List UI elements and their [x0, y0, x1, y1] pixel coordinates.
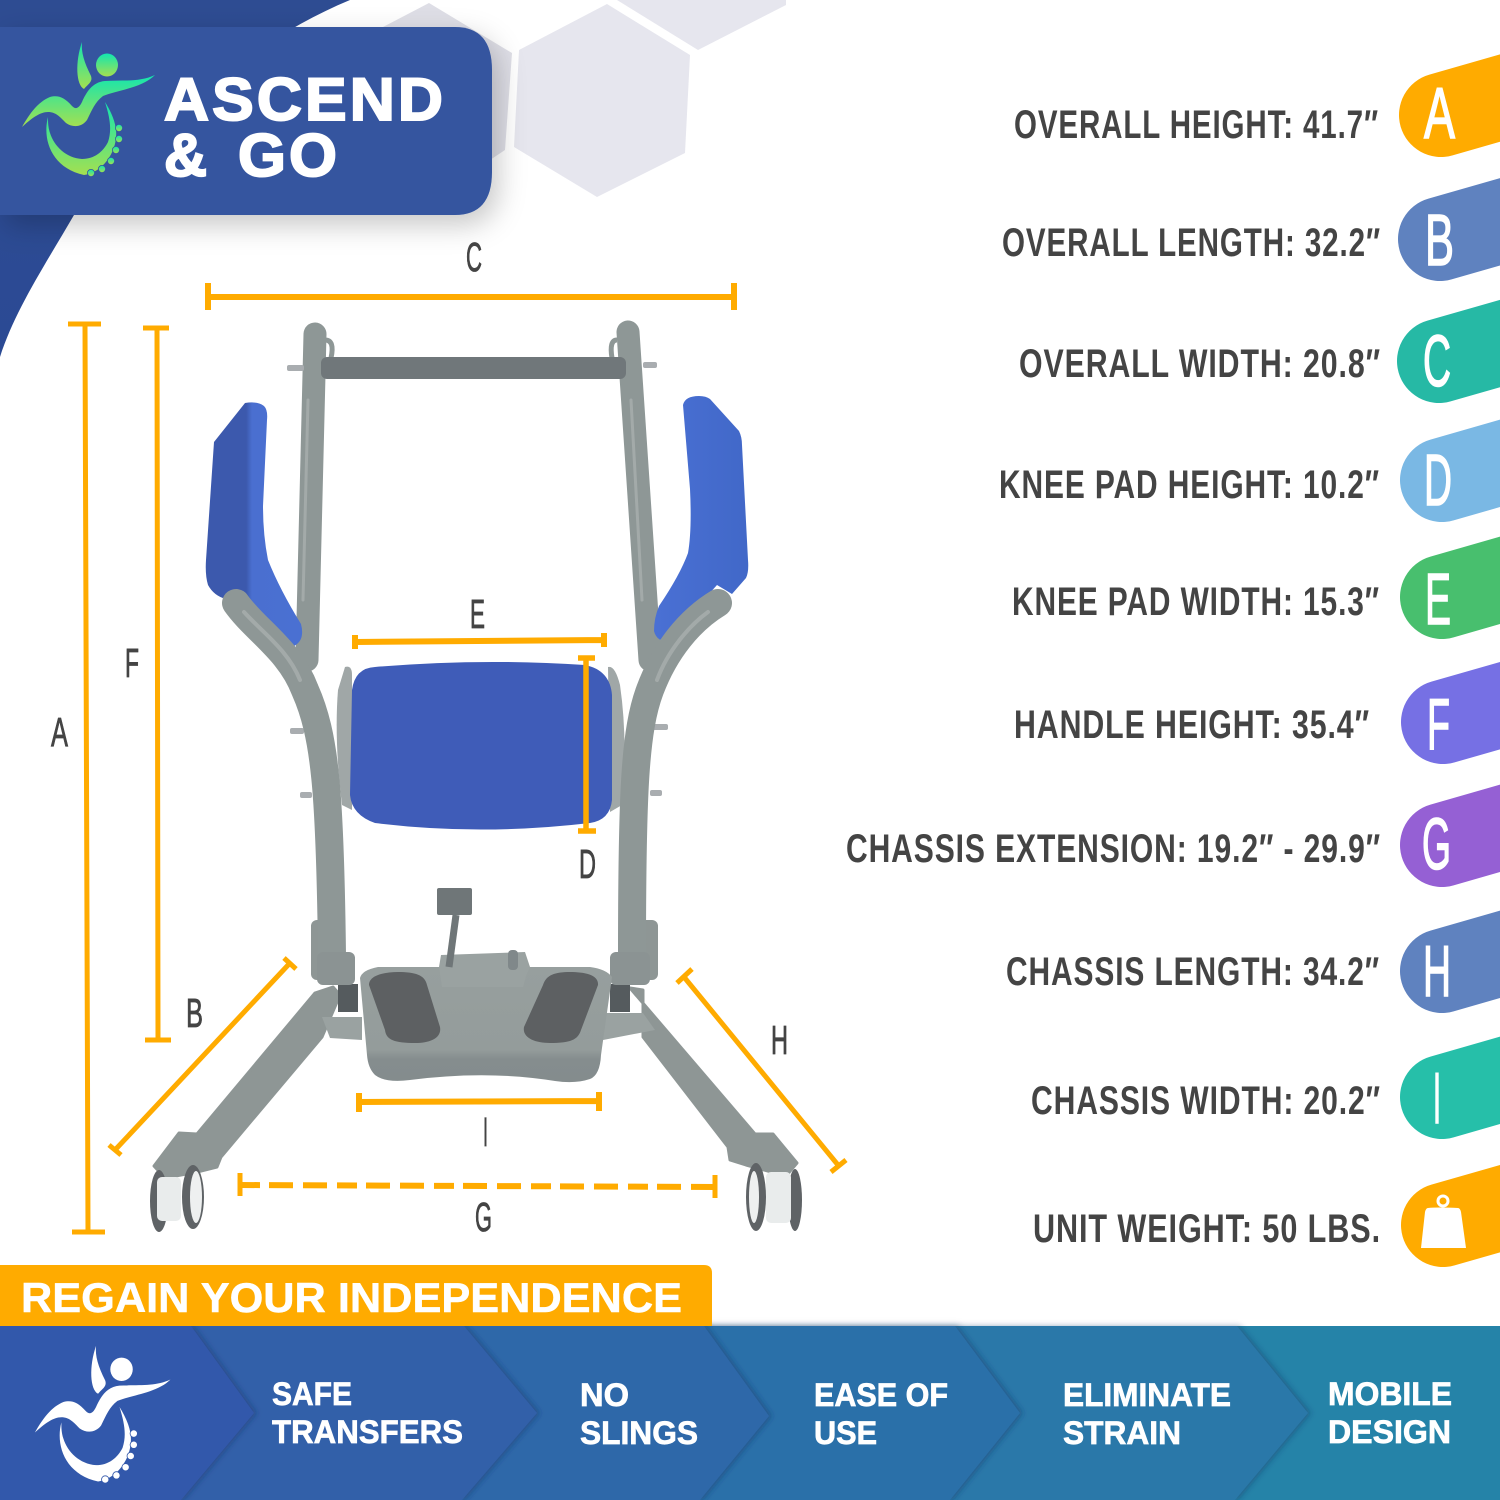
spec list: OVERALL HEIGHT: 41.7″	[1014, 103, 1379, 147]
benefit: mobile design	[1328, 1376, 1452, 1450]
badge H	[1390, 860, 1500, 1023]
icon: Ascend and Go logo	[22, 42, 155, 177]
dimension letters: I	[483, 1109, 488, 1155]
brand name: ASCEND	[164, 66, 446, 133]
badge D: D	[1424, 441, 1452, 521]
dimension letters: H	[771, 1017, 788, 1063]
icon: weight	[1421, 1196, 1466, 1248]
decorative hexagons	[383, 0, 786, 200]
spec list: HANDLE HEIGHT: 35.4″	[1014, 703, 1370, 747]
dimension A	[68, 324, 105, 1232]
benefit: safe transfers: TRANSFERS	[272, 1414, 463, 1450]
dimension letters: E	[470, 591, 485, 637]
knee pad seat	[350, 662, 612, 830]
badge G	[1390, 734, 1500, 897]
dimension E	[355, 633, 604, 649]
dimension letters: G	[475, 1194, 492, 1240]
badge G: G	[1422, 805, 1451, 885]
badge A	[1389, 4, 1500, 167]
left foot pad	[369, 972, 440, 1043]
brand name: GO	[238, 122, 340, 189]
dimension letters: F	[125, 640, 139, 686]
dimension D	[578, 658, 596, 831]
benefit: mobile design: MOBILE	[1328, 1376, 1452, 1412]
benefit: no slings	[580, 1377, 698, 1451]
badge B: B	[1425, 201, 1454, 281]
dimension I	[359, 1092, 599, 1112]
badge D	[1390, 369, 1500, 532]
wheels	[150, 1163, 802, 1232]
benefit: safe transfers	[272, 1376, 463, 1450]
left knee guard	[206, 402, 302, 647]
spec list: OVERALL WIDTH: 20.8″	[1019, 342, 1381, 386]
vertical posts and collars	[311, 920, 658, 1012]
right foot pad	[524, 972, 598, 1043]
dimension B	[109, 958, 296, 1155]
badge I: I	[1433, 1059, 1441, 1139]
badge I	[1390, 986, 1500, 1149]
benefit: ease of use: EASE OF	[814, 1377, 948, 1413]
logo panel	[0, 27, 492, 215]
top handle bar	[321, 357, 626, 379]
tagline banner: REGAIN YOUR INDEPENDENCE	[21, 1274, 682, 1321]
post collars	[317, 952, 650, 985]
benefit: mobile design: DESIGN	[1328, 1414, 1451, 1450]
benefit: no slings: NO	[580, 1377, 629, 1413]
dimension lines	[68, 283, 846, 1232]
dimension letters: B	[186, 990, 203, 1036]
benefit: safe transfers: SAFE	[272, 1376, 352, 1412]
foot platform	[360, 967, 612, 1082]
spec list: UNIT WEIGHT: 50 LBS.	[1033, 1207, 1381, 1251]
dimension G	[240, 1173, 716, 1198]
badge E	[1390, 486, 1500, 649]
spec list: CHASSIS LENGTH: 34.2″	[1006, 950, 1380, 994]
foot pedal	[437, 888, 472, 967]
badge F	[1391, 611, 1500, 774]
brand name	[164, 66, 446, 189]
spec list: KNEE PAD WIDTH: 15.3″	[1012, 580, 1380, 624]
badge A: A	[1424, 74, 1455, 154]
bolts	[287, 362, 668, 798]
tagline banner	[0, 1265, 712, 1326]
icon: white logo	[35, 1346, 171, 1483]
hinge	[439, 950, 530, 987]
badge C: C	[1423, 322, 1451, 402]
benefit: eliminate strain	[1063, 1377, 1231, 1451]
seat side brackets	[337, 667, 625, 812]
dimension letters: C	[466, 234, 482, 280]
badge H: H	[1423, 932, 1451, 1012]
dimension letters: D	[579, 841, 596, 887]
spec list	[846, 103, 1381, 1251]
chassis brackets	[322, 1013, 655, 1040]
benefit: eliminate strain: STRAIN	[1063, 1415, 1181, 1451]
chassis legs	[154, 987, 797, 1178]
badge: unit weight	[1391, 1114, 1500, 1277]
upper frame tubes	[303, 332, 650, 660]
benefit: ease of use	[814, 1377, 948, 1451]
dimension letters: A	[51, 709, 68, 755]
badge C	[1387, 250, 1500, 413]
right knee guard	[654, 396, 748, 642]
lower frame tubes	[236, 603, 718, 955]
benefit: eliminate strain: ELIMINATE	[1063, 1377, 1231, 1413]
spec list: OVERALL LENGTH: 32.2″	[1002, 221, 1381, 265]
benefit: no slings: SLINGS	[580, 1415, 698, 1451]
dimension F	[143, 328, 171, 1040]
spec list: KNEE PAD HEIGHT: 10.2″	[999, 463, 1380, 507]
dimension C	[207, 283, 735, 310]
product illustration: stand-assist lift	[150, 332, 802, 1232]
brand name: &	[164, 122, 210, 189]
benefit: ease of use: USE	[814, 1415, 877, 1451]
badge B	[1388, 128, 1500, 291]
badge E: E	[1425, 560, 1451, 640]
dimension H	[677, 969, 846, 1172]
background swoosh	[0, 0, 350, 357]
dimension letters	[51, 234, 788, 1240]
badge F: F	[1427, 685, 1450, 765]
spec list: CHASSIS WIDTH: 20.2″	[1031, 1079, 1381, 1123]
benefits band	[0, 1326, 1500, 1500]
